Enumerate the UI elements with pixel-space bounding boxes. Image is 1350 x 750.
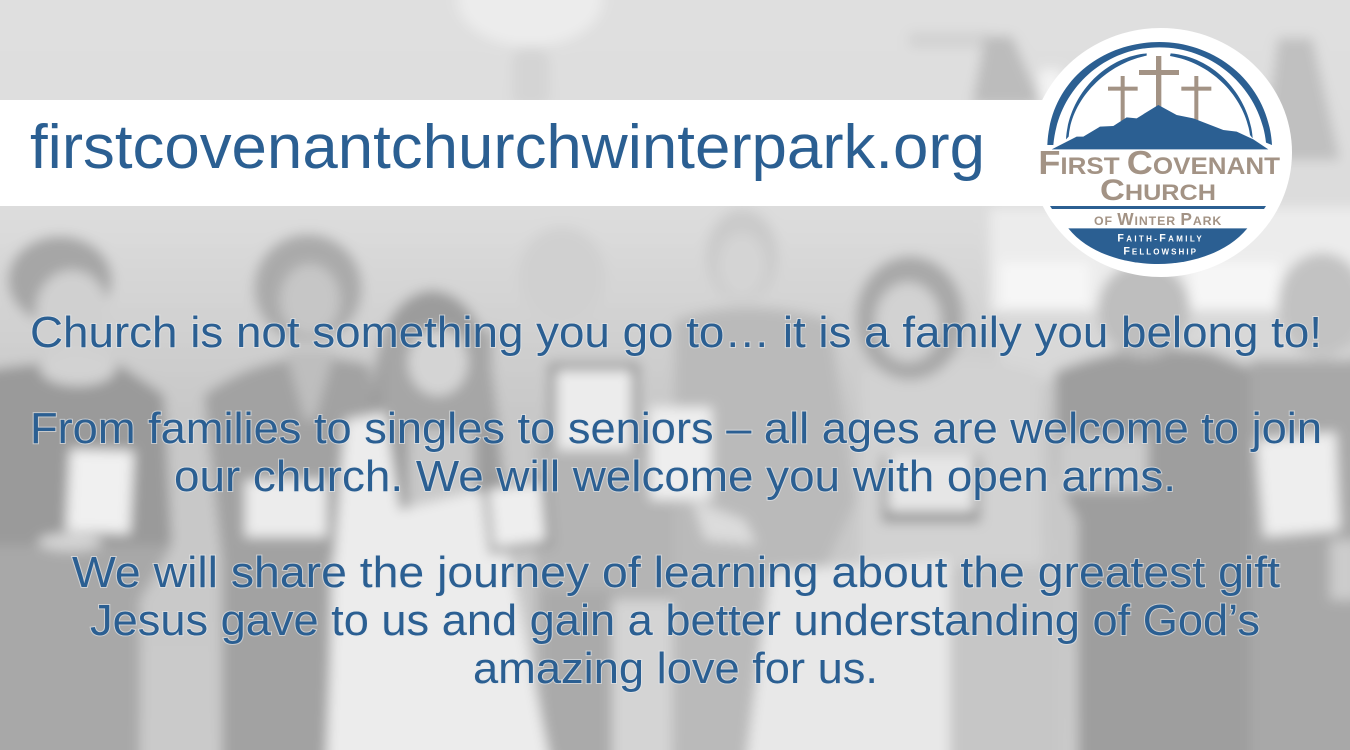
person 1: [0, 363, 170, 750]
papers and frames: [66, 449, 134, 534]
logo name text: CHURCH: [1100, 174, 1216, 207]
body message text: our church. We will welcome you with open arms.: [174, 452, 1176, 501]
logo tagline text: [1117, 233, 1202, 257]
body message text: From families to singles to seniors – all ages are welcome to join: [30, 404, 1322, 453]
body message text: We will share the journey of learning about the greatest gift: [72, 548, 1280, 597]
person 4 body: [535, 440, 675, 750]
body message text: Church is not something you go to… it is a family you belong to!: [30, 308, 1322, 357]
person 8: [1250, 360, 1350, 750]
logo divider and lower banner: [1050, 206, 1266, 264]
person 2: [204, 357, 388, 750]
logo emblem: crosses, arcs and mountain: [1047, 42, 1272, 149]
logo tagline text: FAITH-FAMILY: [1117, 233, 1202, 245]
person 7: [1055, 349, 1295, 750]
white url banner: [0, 100, 1100, 206]
logo name text: [1038, 145, 1280, 229]
logo tagline text: FELLOWSHIP: [1123, 245, 1197, 257]
body message text: Jesus gave to us and gain a better understanding of God’s: [90, 596, 1260, 645]
person 6: [860, 358, 1042, 570]
website url heading: firstcovenantchurchwinterpark.org: [30, 113, 985, 182]
logo name text: OF WINTER PARK: [1094, 209, 1221, 229]
person 3: [372, 290, 510, 540]
body message text: amazing love for us.: [473, 644, 878, 693]
person 5: [672, 308, 856, 750]
logo name text: FIRST COVENANT: [1038, 145, 1280, 182]
logo white circle: [1030, 28, 1292, 277]
